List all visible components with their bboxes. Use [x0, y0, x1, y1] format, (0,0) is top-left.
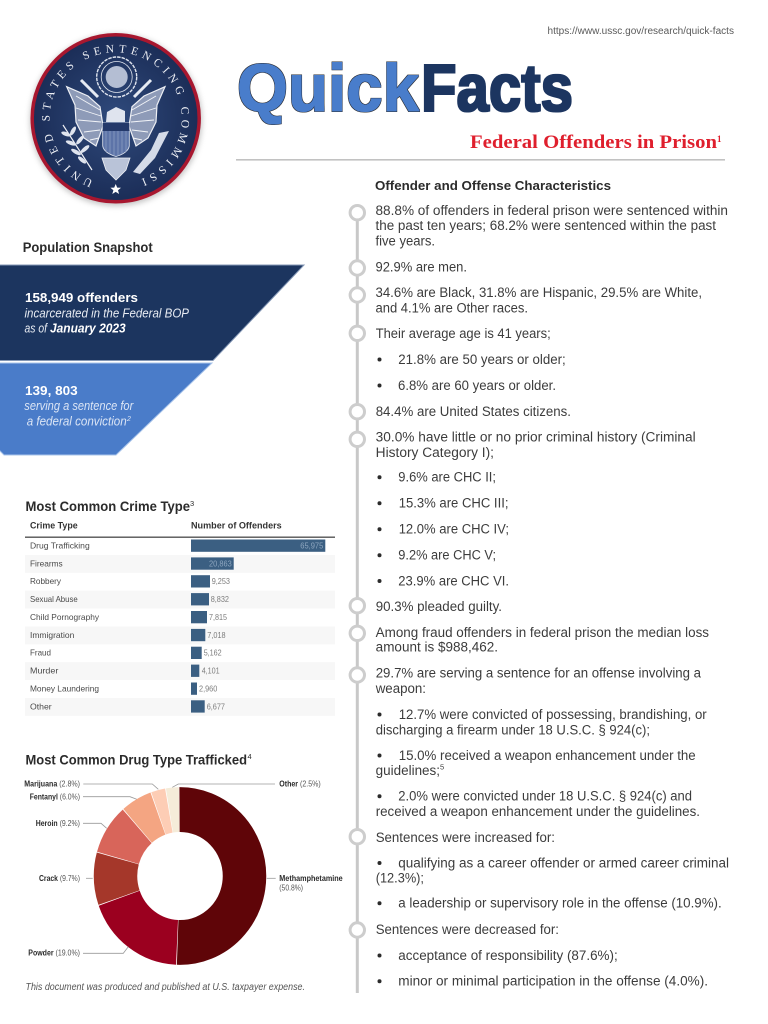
- text block: offender characteristics list: 84.4% are United States citizens.: [376, 404, 571, 419]
- text block: offender characteristics list: 6.8% are 60 years or older.: [398, 378, 556, 393]
- table: crime type bar chart: 2,960: [199, 684, 218, 694]
- text block: offender characteristics list: Sentences were decreased for:: [376, 922, 559, 937]
- donut chart: drug types: Marijuana (2.8%): [24, 779, 80, 789]
- text block: offender characteristics list: minor or minimal participation in the offense (4.0%).: [398, 974, 708, 989]
- donut chart: drug types: Crack (9.7%): [39, 873, 80, 883]
- table: crime type bar chart: 7,815: [209, 613, 227, 622]
- text block: offender characteristics list: 12.7% were convicted of possessing, brandishing, or: [399, 707, 707, 722]
- panel: total population banner: incarcerated in the Federal BOP: [24, 306, 190, 320]
- text block: offender characteristics list: acceptance of responsibility (87.6%);: [398, 948, 618, 963]
- text block: offender characteristics list: 29.7% are serving a sentence for an offense involving a: [376, 666, 702, 681]
- table: crime type bar chart: Crime Type: [30, 520, 78, 530]
- text block: offender characteristics list: qualifying as a career offender or armed career criminal: [398, 856, 729, 871]
- table: crime type bar chart: Number of Offenders: [191, 520, 282, 530]
- table: crime type bar chart: Drug Trafficking: [30, 540, 90, 550]
- donut chart: drug types: Other (2.5%): [279, 779, 321, 789]
- text block: offender characteristics list: 9.6% are CHC II;: [398, 470, 496, 485]
- text block: offender characteristics list: History Category I);: [376, 445, 494, 460]
- text block: offender characteristics list: discharging a firearm under 18 U.S.C. § 924(c);: [376, 722, 650, 737]
- source url: https://www.ussc.gov/research/quick-facts: [548, 26, 734, 37]
- text block: offender characteristics list: 15.3% are CHC III;: [399, 496, 508, 511]
- text block: offender characteristics list: guidelines;: [376, 763, 440, 778]
- text block: offender characteristics list: 21.8% are 50 years or older;: [398, 352, 566, 367]
- panel: total population banner: January 2023: [50, 322, 126, 336]
- panel: sentenced population banner: 2: [126, 416, 131, 423]
- table: crime type bar chart: Fraud: [30, 648, 51, 658]
- donut chart: drug types: (50.8%): [279, 882, 303, 892]
- table: crime type bar chart: 8,832: [211, 595, 229, 604]
- heading: Most Common Drug Type Trafficked: 4: [248, 752, 252, 761]
- panel: sentenced population banner: 139, 803: [25, 383, 78, 398]
- table: crime type bar chart: Other: [30, 701, 52, 711]
- subtitle: Federal Offenders in Prison: Federal Offenders in Prison: [470, 132, 717, 153]
- donut chart: drug types: Methamphetamine: [279, 873, 343, 883]
- text block: offender characteristics list: 88.8% of offenders in federal prison were sentenced within: [376, 203, 728, 218]
- title: QuickFacts logo: Quick: [237, 51, 420, 126]
- panel: sentenced population banner: a federal conviction: [27, 415, 127, 429]
- donut chart: drug types: Powder (19.0%): [28, 948, 80, 958]
- panel: total population banner: [0, 265, 304, 360]
- text block: offender characteristics list: five years.: [376, 234, 435, 249]
- timeline: spine and nodes: [350, 205, 364, 993]
- panel: sentenced population banner: [0, 363, 212, 455]
- donut chart: drug types: Heroin (9.2%): [36, 818, 80, 828]
- table: crime type bar chart: Money Laundering: [30, 684, 99, 694]
- text block: offender characteristics list: 90.3% pleaded guilty.: [376, 599, 502, 614]
- table: crime type bar chart: 6,677: [207, 702, 225, 711]
- text block: offender characteristics list: and 4.1% are Other races.: [376, 300, 528, 315]
- text block: offender characteristics list: received a weapon enhancement under the guidelines.: [376, 804, 700, 819]
- seal: United States Sentencing Commission: [27, 31, 205, 209]
- text block: offender characteristics list: 34.6% are Black, 31.8% are Hispanic, 29.5% are White,: [376, 285, 702, 300]
- text block: offender characteristics list: Among fraud offenders in federal prison the median loss: [376, 625, 709, 640]
- heading: Most Common Crime Type: 3: [190, 499, 194, 508]
- table: crime type bar chart: [25, 520, 335, 716]
- heading: Most Common Crime Type: Most Common Crime Type: [26, 499, 190, 514]
- table: crime type bar chart: 5,162: [204, 649, 222, 658]
- text block: offender characteristics list: weapon:: [375, 681, 426, 696]
- text block: offender characteristics list: the past ten years; 68.2% were sentenced within the past: [376, 218, 716, 233]
- text block: offender characteristics list: (12.3%);: [376, 871, 424, 886]
- panel: total population banner: as of: [24, 322, 48, 336]
- text block: offender characteristics list: Sentences were increased for:: [376, 830, 555, 845]
- table: crime type bar chart: Robbery: [30, 576, 62, 586]
- text block: offender characteristics list: [375, 203, 729, 989]
- footer note: This document was produced and published at U.S. taxpayer expense.: [26, 982, 305, 993]
- text block: offender characteristics list: Their average age is 41 years;: [376, 326, 551, 341]
- table: crime type bar chart: Immigration: [30, 630, 75, 640]
- table: crime type bar chart: 4,101: [202, 667, 220, 676]
- panel: total population banner: 158,949 offenders: [25, 290, 138, 305]
- table: crime type bar chart: Sexual Abuse: [30, 594, 78, 604]
- table: crime type bar chart: 20,863: [209, 559, 232, 568]
- table: crime type bar chart: Child Pornography: [30, 612, 100, 622]
- table: crime type bar chart: Firearms: [30, 558, 63, 568]
- subtitle: Federal Offenders in Prison: 1: [717, 134, 722, 144]
- table: crime type bar chart: Murder: [30, 666, 59, 676]
- text block: offender characteristics list: a leadership or supervisory role in the offense (10.9%).: [398, 896, 722, 911]
- text block: offender characteristics list: 30.0% have little or no prior criminal history (Criminal: [376, 430, 696, 445]
- heading: Offender and Offense Characteristics: Offender and Offense Characteristics: [375, 178, 611, 193]
- text block: offender characteristics list: 2.0% were convicted under 18 U.S.C. § 924(c) and: [398, 789, 692, 804]
- bullets: [378, 358, 382, 983]
- table: crime type bar chart: 7,018: [207, 631, 226, 640]
- title: QuickFacts logo: Facts: [421, 51, 573, 126]
- table: crime type bar chart: 9,253: [212, 577, 230, 586]
- heading: Most Common Drug Type Trafficked: Most Common Drug Type Trafficked: [26, 752, 247, 767]
- heading: Population Snapshot: Population Snapshot: [23, 240, 153, 255]
- title: QuickFacts logo: [237, 51, 573, 126]
- text block: offender characteristics list: 12.0% are CHC IV;: [399, 522, 509, 537]
- text block: offender characteristics list: 92.9% are men.: [376, 260, 467, 275]
- donut chart: drug types: Fentanyl (6.0%): [30, 791, 80, 801]
- text block: offender characteristics list: 5: [440, 762, 444, 772]
- text block: offender characteristics list: 15.0% received a weapon enhancement under the: [399, 748, 696, 763]
- text block: offender characteristics list: 9.2% are CHC V;: [398, 548, 496, 563]
- table: crime type bar chart: 65,975: [300, 542, 324, 550]
- text block: offender characteristics list: 23.9% are CHC VI.: [398, 573, 509, 588]
- text block: offender characteristics list: amount is $988,462.: [376, 640, 498, 655]
- donut chart: drug types: [24, 779, 343, 958]
- panel: sentenced population banner: serving a sentence for: [24, 399, 134, 413]
